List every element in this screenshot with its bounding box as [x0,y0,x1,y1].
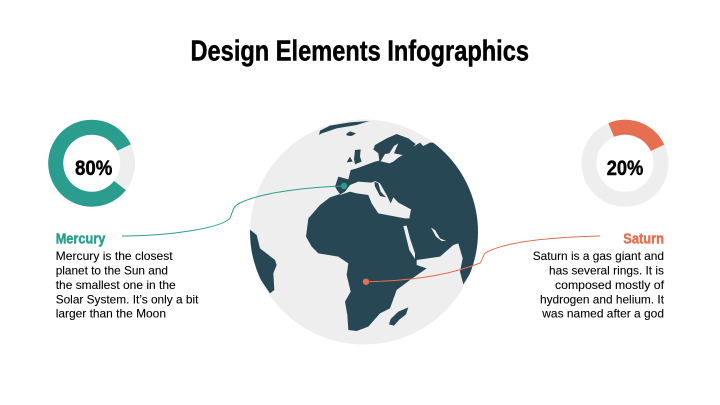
text block: Saturn: was named after a god [541,307,664,321]
British Isles [347,149,362,164]
Madagascar [389,307,408,326]
text block: Mercury: Solar System. It’s only a bit [56,292,199,306]
land: Europe, Asia and Africa [306,134,478,331]
Mediterranean and Baltic seas [340,143,411,218]
text block: Mercury: planet to the Sun and [56,264,168,278]
text block: Mercury: Mercury [56,230,106,247]
Italy [374,182,386,197]
text block: Mercury: Mercury is the closest [56,249,173,263]
donut chart: Mercury 80%: 80% [75,157,113,180]
text block: Saturn [533,230,665,321]
text block: Saturn: composed mostly of [555,278,665,292]
connector line: Saturn [363,236,600,285]
text block: Saturn: has several rings. It is [549,264,664,278]
donut chart: Saturn 20% [589,127,661,199]
South America [248,228,277,293]
text block: Saturn: Saturn is a gas giant and [533,249,664,263]
donut chart: Mercury 80% [56,127,128,199]
globe [250,120,478,344]
text block: Saturn: Saturn [623,230,664,247]
infographic canvas [48,39,668,344]
Iceland [346,131,356,136]
text block: Mercury [56,230,199,321]
connector line: Mercury [122,183,347,236]
Greenland [319,121,369,135]
text block: Mercury: larger than the Moon [56,307,166,321]
Red Sea and Persian Gulf [403,226,446,259]
donut chart: Saturn 20%: 20% [607,157,644,180]
title: Design Elements Infographics [190,36,529,68]
text block: Mercury: the smallest one in the [56,278,176,292]
text block: Saturn: hydrogen and helium. It [540,292,665,306]
